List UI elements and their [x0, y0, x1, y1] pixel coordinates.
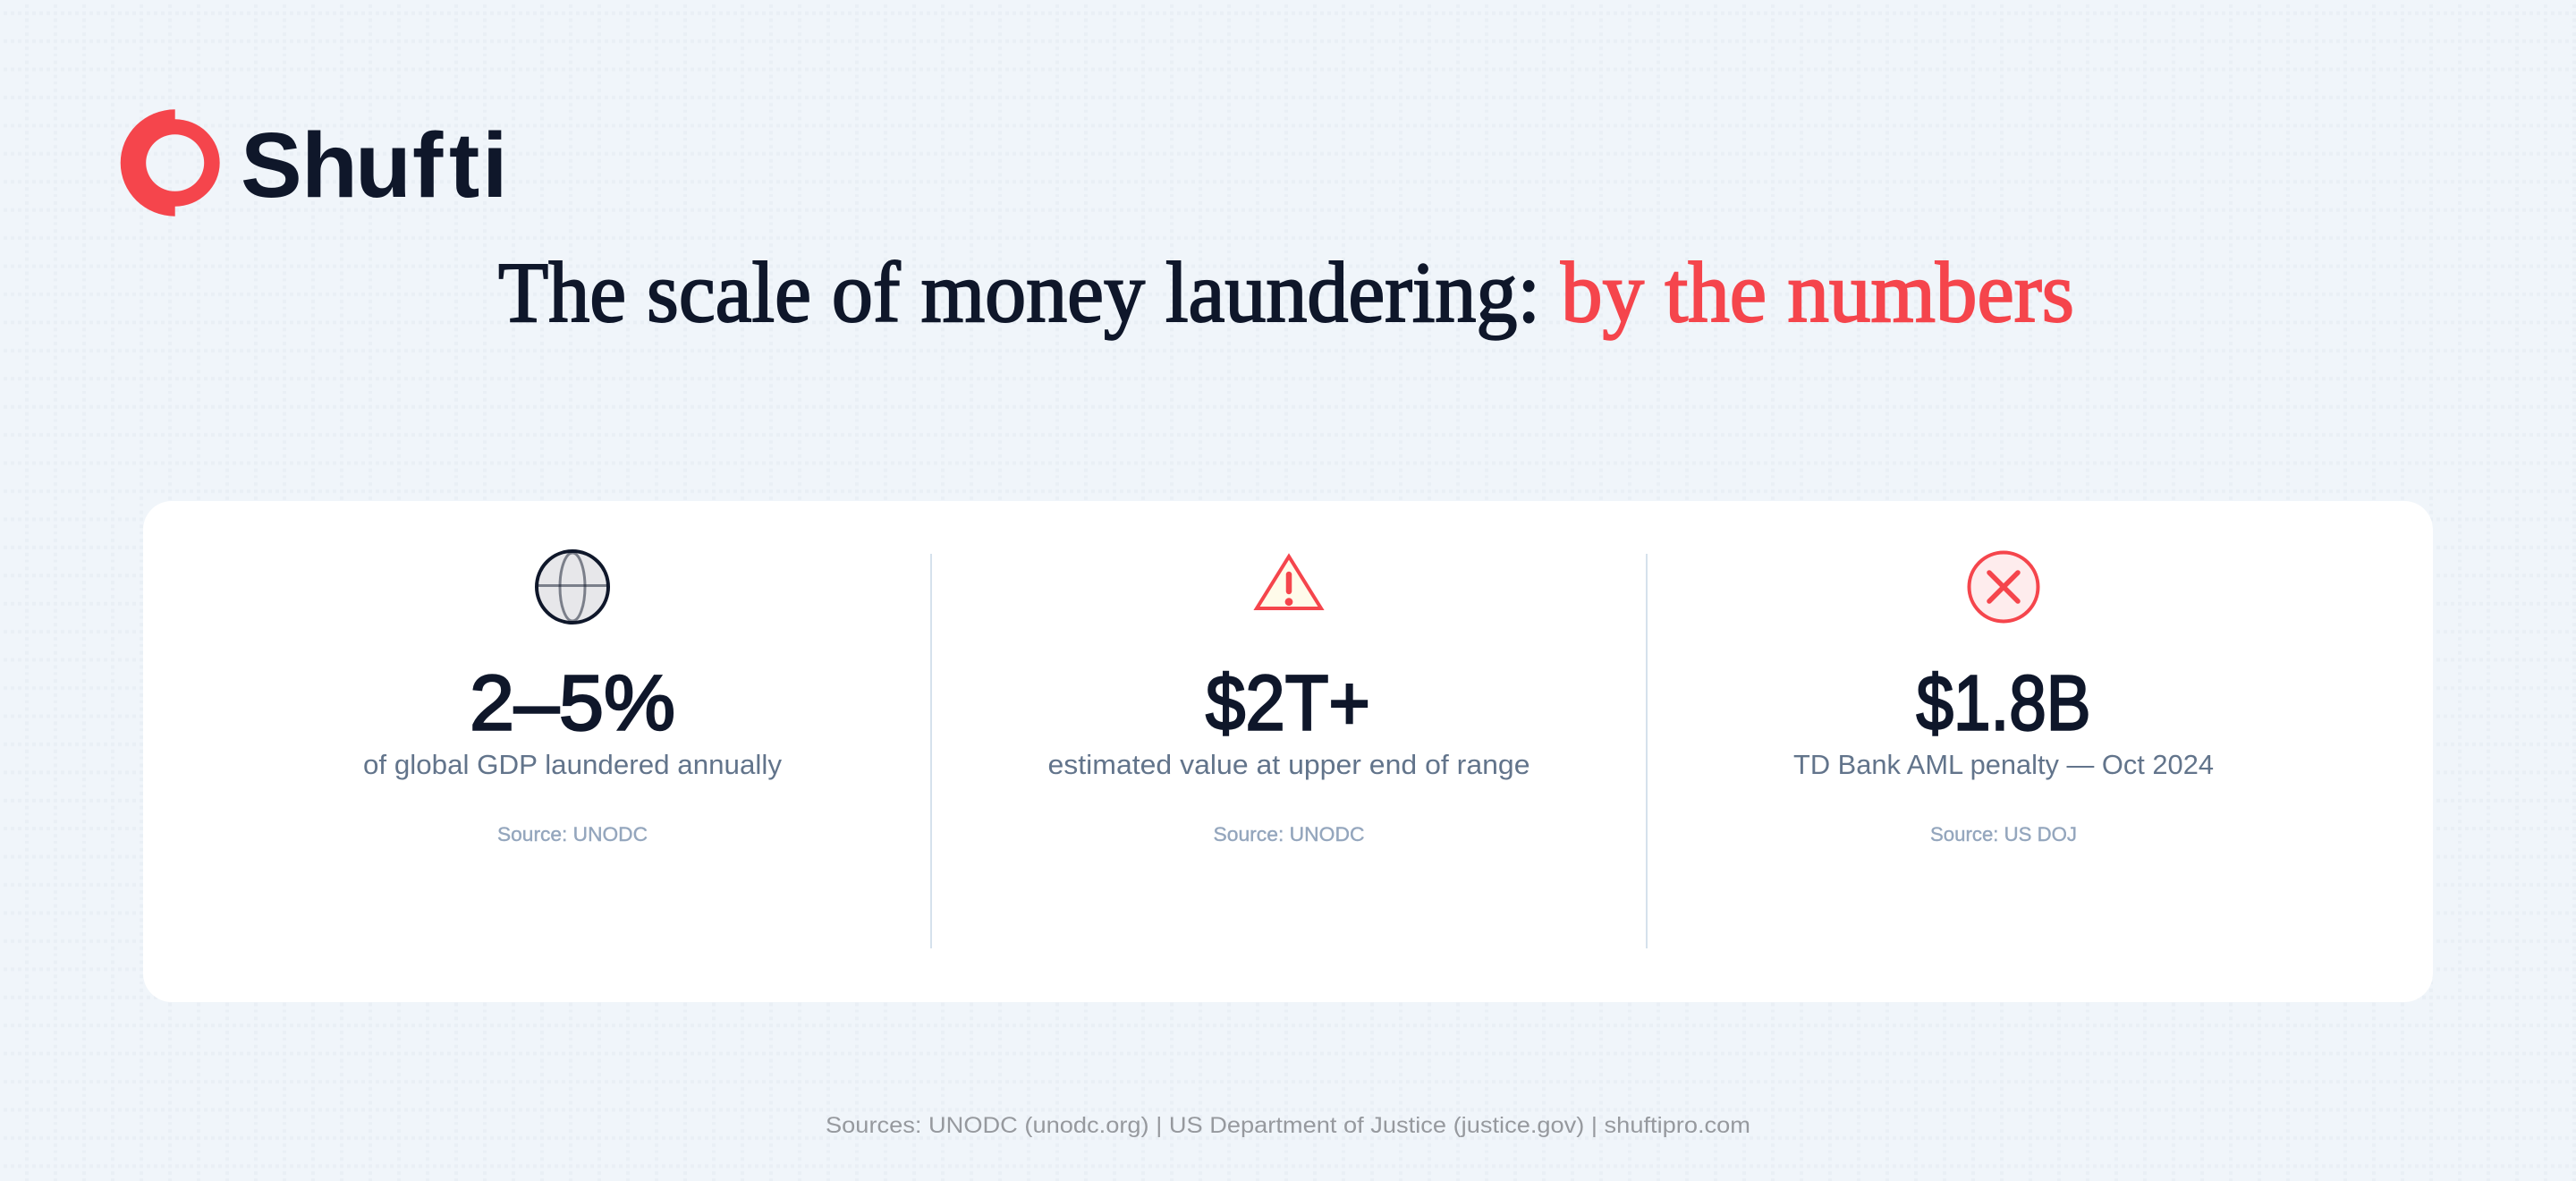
title: by the numbers — [1561, 244, 2074, 340]
stat description: TD Bank AML penalty — Oct 2024 — [1793, 749, 2214, 780]
stat description: estimated value at upper end of range — [1048, 749, 1530, 780]
stat value: $2T+ — [1206, 660, 1370, 746]
stat source: Source: UNODC — [1213, 823, 1365, 845]
logo wordmark: Shufti — [241, 114, 508, 217]
stat: upper estimate — [1048, 557, 1530, 845]
title — [498, 244, 2074, 340]
icon: warning triangle — [1257, 557, 1321, 608]
icon: cross in circle — [1970, 553, 2038, 621]
title: The scale of money laundering: — [498, 244, 1540, 340]
stat: TD Bank penalty — [1793, 553, 2214, 845]
panel: statistics card — [143, 501, 2433, 1002]
footer sources: Sources: UNODC (unodc.org) | US Department of Justice (justice.gov) | shuftipro.com — [826, 1113, 1750, 1138]
stat value: $1.8B — [1916, 660, 2091, 746]
stat value: 2–5% — [470, 660, 675, 746]
stat source: Source: US DOJ — [1930, 823, 2077, 845]
stat source: Source: UNODC — [497, 823, 648, 845]
icon: Shufti ring mark — [121, 109, 220, 217]
icon: globe — [537, 551, 608, 623]
logo: Shufti — [121, 109, 508, 217]
stat: global GDP share — [363, 551, 782, 845]
stat description: of global GDP laundered annually — [363, 749, 782, 780]
